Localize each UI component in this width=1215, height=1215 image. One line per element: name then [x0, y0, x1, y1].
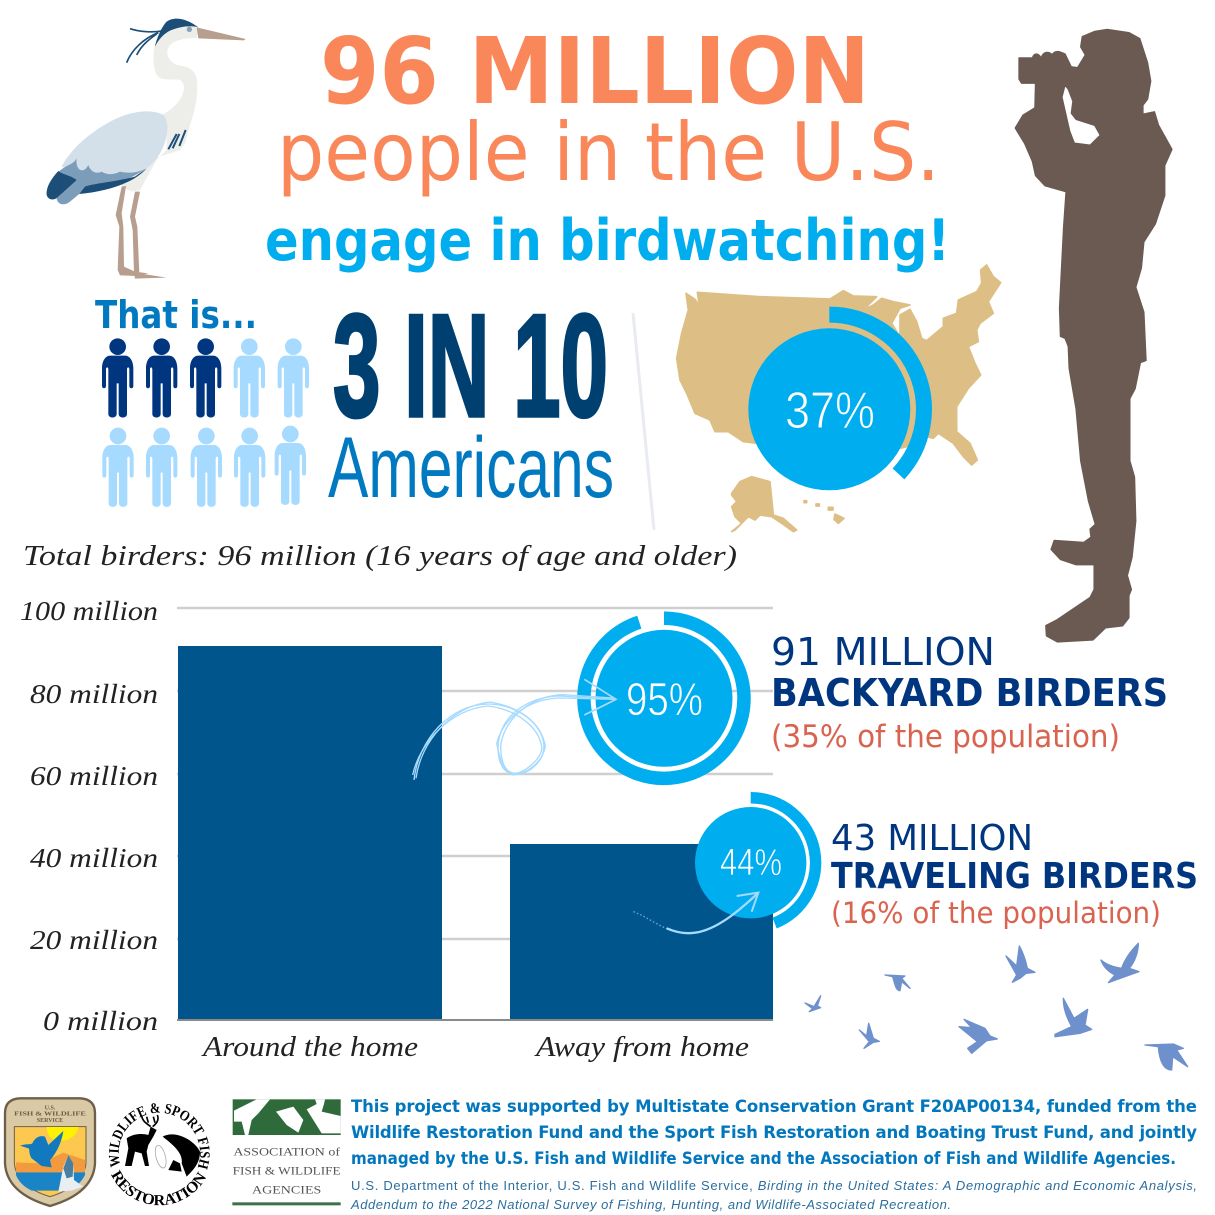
callout: traveling birders: 43 MILLION	[831, 818, 1033, 859]
logo: Wildlife and Sport Fish Restoration	[108, 1103, 210, 1206]
text block: funding statement: Wildlife Restoration Fund and the Sport Fish Restoration and Boating Trust Fund, and jointly	[351, 1123, 1197, 1142]
circle: 37 percent	[748, 328, 910, 490]
text block: funding statement: This project was supported by Multistate Conservation Grant F20AP00134, funded from the	[351, 1097, 1197, 1116]
logo: Association of Fish and Wildlife Agencies: AGENCIES	[252, 1183, 321, 1196]
subtitle: people in the U.S.: people in the U.S.	[277, 106, 940, 199]
logos	[4, 1097, 341, 1208]
x axis labels: Away from home	[534, 1031, 749, 1063]
bar: around the home	[178, 646, 442, 1020]
callout: traveling birders	[831, 818, 1198, 930]
logo: Association of Fish and Wildlife Agencies	[232, 1099, 341, 1205]
text block: citation: U.S. Department of the Interior, U.S. Fish and Wildlife Service, Birding in the United States: A Demographic and Economic Analysis,	[351, 1178, 1197, 1193]
text block: funding statement	[351, 1097, 1197, 1168]
chart title: Total birders: 96 million (16 years of age and older)	[23, 540, 737, 572]
x axis labels	[201, 1031, 749, 1063]
illustration: person with binoculars	[1015, 30, 1172, 642]
callout: backyard birders	[771, 630, 1168, 755]
bar chart	[20, 596, 773, 1063]
bar: away from home	[510, 844, 773, 1020]
text block: citation	[350, 1178, 1197, 1212]
y axis labels	[20, 596, 158, 1036]
logo: US Fish and Wildlife Service	[5, 1098, 95, 1206]
panel: US map with 37 percent	[677, 265, 1001, 532]
donut: 44 percent	[695, 798, 816, 923]
label: Americans: Americans	[328, 420, 614, 516]
callout: backyard birders: (35% of the population)	[771, 719, 1120, 755]
logo: US Fish and Wildlife Service: U.S.	[45, 1105, 56, 1111]
callout: traveling birders: (16% of the population)	[831, 896, 1161, 930]
donut: 95 percent	[584, 618, 744, 778]
callout: backyard birders: 91 MILLION	[771, 630, 995, 674]
donut: 44 percent: 44%	[720, 842, 782, 884]
y axis labels: 20 million	[30, 925, 158, 955]
y axis labels: 60 million	[30, 761, 158, 791]
callout: backyard birders: BACKYARD BIRDERS	[771, 671, 1168, 715]
logo: Association of Fish and Wildlife Agencies: FISH & WILDLIFE	[233, 1164, 341, 1177]
y axis labels: 100 million	[20, 596, 158, 626]
logo: US Fish and Wildlife Service: SERVICE	[37, 1118, 63, 1124]
logo: Association of Fish and Wildlife Agencies: ASSOCIATION of	[233, 1145, 340, 1158]
panel: 3 in 10 Americans	[95, 284, 614, 516]
logo: US Fish and Wildlife Service: FISH & WILDLIFE	[14, 1112, 86, 1118]
heading: that is: That is...	[95, 293, 257, 337]
logo: Wildlife and Sport Fish Restoration: RESTORATION	[111, 1170, 206, 1206]
y axis labels: 40 million	[30, 843, 158, 873]
y axis labels: 0 million	[43, 1006, 158, 1036]
x axis labels: Around the home	[201, 1031, 418, 1063]
illustration: heron	[47, 19, 246, 279]
text block: citation: Addendum to the 2022 National Survey of Fishing, Hunting, and Wildlife-Associated Recreation.	[350, 1197, 951, 1212]
subtitle: engage in birdwatching: engage in birdwatching!	[265, 208, 950, 274]
ring: 37 percent arc	[829, 315, 924, 474]
value: 37 percent: 37%	[785, 382, 875, 440]
arrow: to 44 percent	[633, 893, 758, 933]
map: United States	[677, 265, 1001, 532]
donut: 95 percent: 95%	[626, 673, 703, 725]
icon row: people pictogram	[102, 338, 309, 507]
y axis labels: 80 million	[30, 679, 158, 709]
title: 96 million: 96 MILLION	[320, 18, 870, 125]
logo: Wildlife and Sport Fish Restoration: WILDLIFE & SPORT FISH	[108, 1103, 210, 1170]
big number: 3 in 10: 3 IN 10	[333, 284, 608, 447]
arrow: loop to 95 percent	[413, 679, 616, 780]
illustration: flock of birds	[805, 943, 1188, 1070]
